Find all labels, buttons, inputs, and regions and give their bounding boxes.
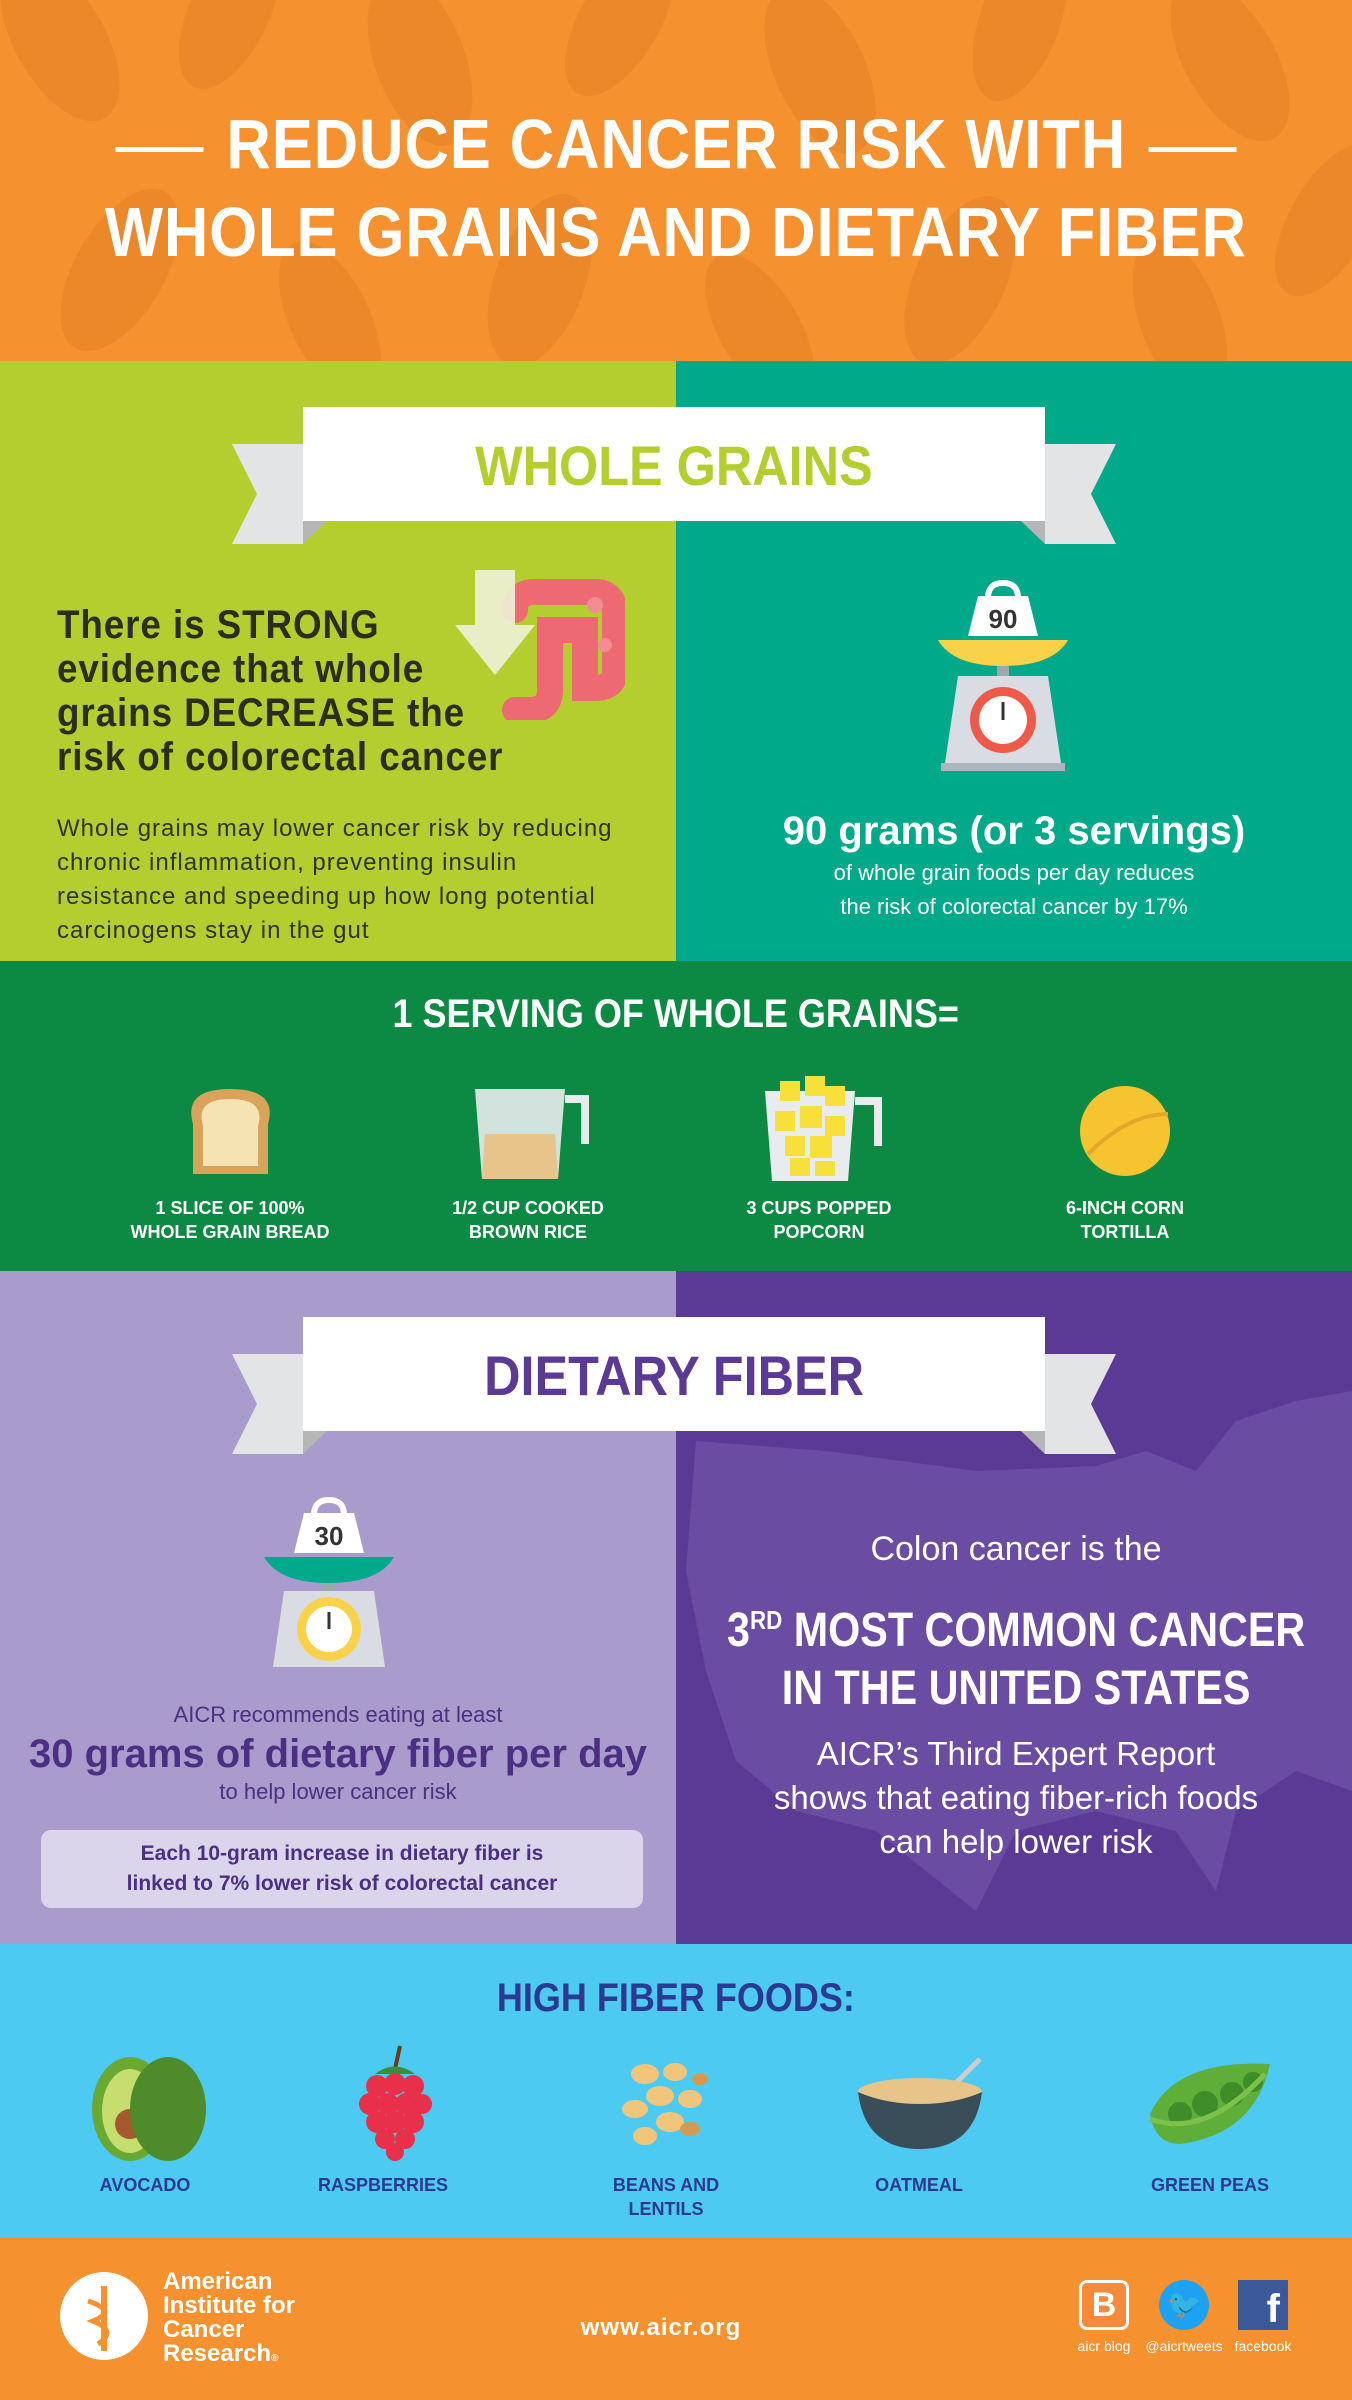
text: AICR recommends: AICR recommends eating at least <box>174 1702 502 1727</box>
icons: social: facebook <box>1235 2338 1291 2354</box>
panel: serving of whole grains: POPCORN <box>773 1222 864 1242</box>
icon: raspberries <box>359 2046 432 2161</box>
text: strong evidence <box>57 603 503 779</box>
text: strong evidence: grains DECREASE the <box>57 691 465 735</box>
panel: serving of whole grains: 6-INCH CORN <box>1066 1198 1184 1218</box>
icons: social: f <box>1267 2287 1280 2331</box>
header background <box>0 0 1352 361</box>
logo: AICR: American Institute for Cancer Research® <box>163 2268 295 2367</box>
panel: dietary fiber left <box>0 1271 676 1944</box>
text: colon cancer 3rd <box>727 1530 1305 1860</box>
labels: WHOLE GRAIN BREAD <box>130 1222 330 1242</box>
icon: popcorn cup <box>765 1076 882 1181</box>
icon: brown rice cup <box>475 1089 589 1179</box>
callout: 10-gram increase: Each 10-gram increase in dietary fiber is <box>141 1842 543 1865</box>
labels: 1 SLICE OF 100% <box>155 1198 305 1218</box>
footer <box>0 2238 1352 2400</box>
banner: whole grains <box>232 407 1116 544</box>
banner: whole grains: WHOLE GRAINS <box>475 434 873 497</box>
panel: serving of whole grains: BROWN RICE <box>469 1222 587 1242</box>
icons: social: 🐦 <box>1167 2289 1201 2320</box>
text: whole grains may lower: resistance and speeding up how long potential <box>57 883 596 910</box>
text: strong evidence: risk of colorectal cancer <box>57 735 503 779</box>
text: strong evidence: evidence that whole <box>57 647 424 691</box>
labels <box>130 1198 330 1242</box>
labels: AVOCADO <box>100 2175 190 2195</box>
text: strong evidence: There is STRONG <box>57 603 380 647</box>
icon: scale 90: 90 <box>989 604 1017 634</box>
callout: 10-gram increase: linked to 7% lower risk of colorectal cancer <box>127 1872 557 1895</box>
panel: whole grains right <box>676 361 1352 961</box>
text: website: www.aicr.org <box>581 2314 741 2341</box>
icons: social: B <box>1092 2286 1116 2324</box>
text: whole grains may lower: carcinogens stay in the gut <box>57 917 370 944</box>
text: whole grains may lower <box>57 815 613 944</box>
text: AICR recommends <box>29 1702 647 1804</box>
icon: beans <box>622 2063 708 2145</box>
icon: scale 30 <box>264 1497 394 1667</box>
panel: whole grains left <box>0 361 676 961</box>
title: REDUCE CANCER RISK WITH <box>226 105 1126 183</box>
panel: high fiber foods: GREEN PEAS <box>1151 2175 1269 2195</box>
panel: high fiber foods: LENTILS <box>628 2199 704 2219</box>
icons: social: @aicrtweets <box>1145 2338 1223 2354</box>
icon: green peas <box>1149 2064 1270 2144</box>
icon: scale 90 <box>938 580 1068 771</box>
icons: social: aicr blog <box>1078 2338 1130 2354</box>
panel: high fiber foods: OATMEAL <box>875 2175 963 2195</box>
icon: intestine with down arrow <box>455 570 625 720</box>
text: colon cancer 3rd: IN THE UNITED STATES <box>782 1662 1250 1715</box>
text: 90 grams: of whole grain foods per day reduces <box>834 860 1194 885</box>
logo: AICR <box>60 2268 295 2367</box>
callout: 10-gram increase <box>41 1830 643 1908</box>
icons: social <box>1078 2280 1292 2354</box>
title: WHOLE GRAINS AND DIETARY FIBER <box>105 193 1247 271</box>
text: colon cancer 3rd: shows that eating fiber-rich foods <box>774 1779 1258 1816</box>
heading: 1 SERVING OF WHOLE GRAINS= <box>393 992 959 1036</box>
panel: high fiber foods: BEANS AND <box>613 2175 719 2195</box>
icon: bread <box>191 1089 270 1174</box>
text: AICR recommends: 30 grams of dietary fiber per day <box>29 1732 647 1776</box>
text: whole grains may lower: Whole grains may lower cancer risk by reducing <box>57 815 613 842</box>
text: 90 grams: the risk of colorectal cancer by 17% <box>840 894 1188 919</box>
banner: dietary fiber <box>232 1317 1116 1454</box>
icon: oatmeal bowl <box>858 2057 982 2149</box>
text: whole grains may lower: chronic inflammation, preventing insulin <box>57 849 517 876</box>
text: colon cancer 3rd: 3RD MOST COMMON CANCER <box>727 1604 1305 1657</box>
text: 90 grams <box>783 809 1245 919</box>
icon: avocado <box>92 2057 206 2161</box>
icon: tortilla <box>1080 1086 1170 1176</box>
panel: dietary fiber right <box>676 1271 1352 1944</box>
heading: HIGH FIBER FOODS: <box>497 1976 855 2020</box>
text: 90 grams: 90 grams (or 3 servings) <box>783 809 1245 853</box>
panel: serving of whole grains: 3 CUPS POPPED <box>746 1198 892 1218</box>
banner: dietary fiber: DIETARY FIBER <box>484 1344 864 1407</box>
panel: high fiber foods <box>0 1944 1352 2238</box>
text: colon cancer 3rd: can help lower risk <box>879 1823 1153 1860</box>
panel: serving of whole grains: 1/2 CUP COOKED <box>452 1198 604 1218</box>
text: colon cancer 3rd: AICR’s Third Expert Report <box>817 1735 1215 1772</box>
text: AICR recommends: to help lower cancer risk <box>219 1779 457 1804</box>
icon: scale 30: 30 <box>315 1521 343 1551</box>
panel: high fiber foods: RASPBERRIES <box>318 2175 448 2195</box>
text: colon cancer 3rd: Colon cancer is the <box>870 1530 1162 1568</box>
title <box>104 105 1247 271</box>
panel: serving of whole grains <box>0 961 1352 1271</box>
panel: serving of whole grains: TORTILLA <box>1081 1222 1169 1242</box>
